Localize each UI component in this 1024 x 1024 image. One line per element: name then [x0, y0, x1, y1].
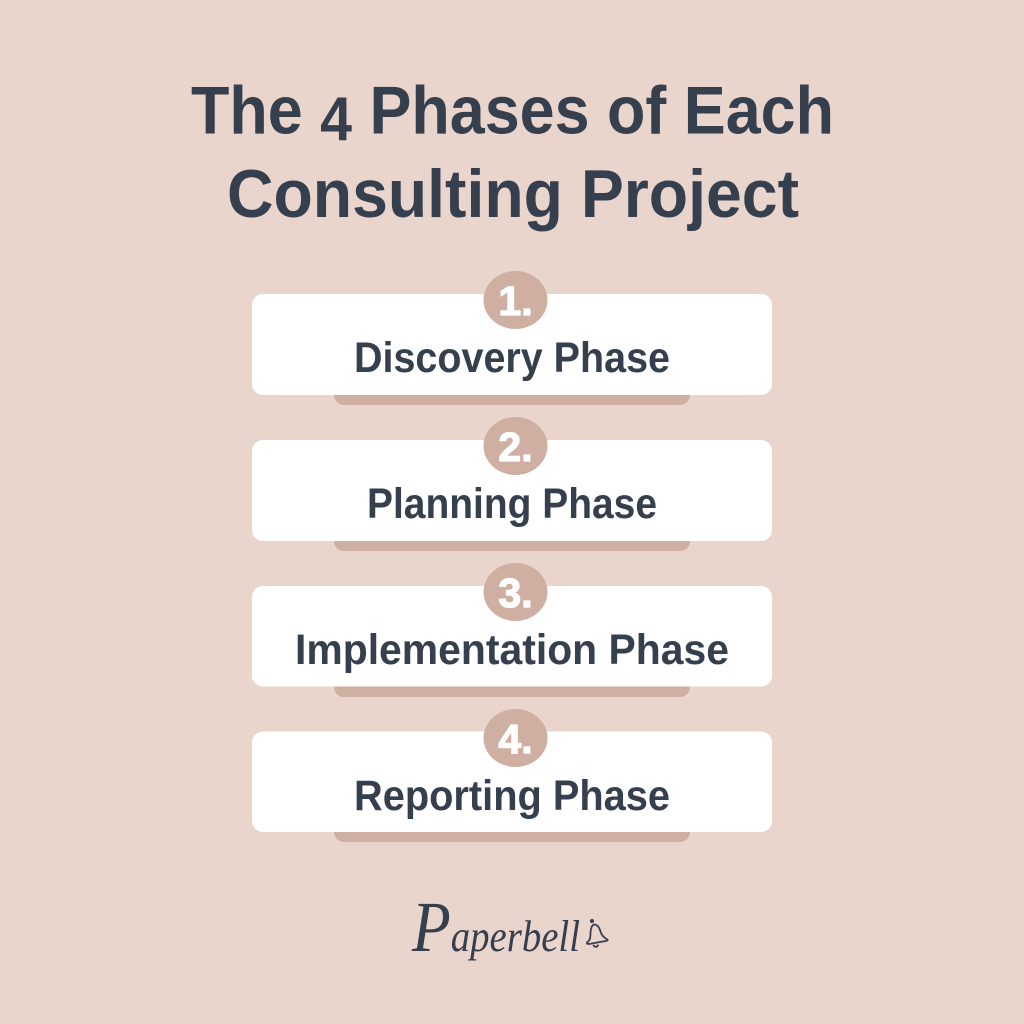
title: The	[191, 72, 312, 148]
panel: reporting phase	[252, 709, 772, 842]
icon: bell	[587, 920, 608, 947]
panel: reporting phase: Reporting Phase	[354, 772, 670, 820]
title: Phases of Each	[352, 72, 834, 148]
panel: reporting phase: 4.	[498, 716, 533, 762]
panel: implementation phase: Implementation Phase	[295, 626, 729, 674]
logo: Paperbell: Paperbell	[411, 887, 580, 967]
panel: implementation phase	[252, 563, 772, 697]
panel: discovery phase: 1.	[498, 278, 533, 324]
panel: planning phase: Planning Phase	[367, 480, 657, 528]
panel: discovery phase	[252, 271, 772, 405]
title: Consulting Project	[227, 156, 799, 232]
panel: discovery phase: Discovery Phase	[354, 334, 670, 382]
panel: planning phase: 2.	[498, 424, 533, 470]
title	[191, 72, 834, 232]
panel: implementation phase: 3.	[498, 570, 533, 616]
title: 4	[320, 85, 353, 154]
panel: planning phase	[252, 417, 772, 551]
